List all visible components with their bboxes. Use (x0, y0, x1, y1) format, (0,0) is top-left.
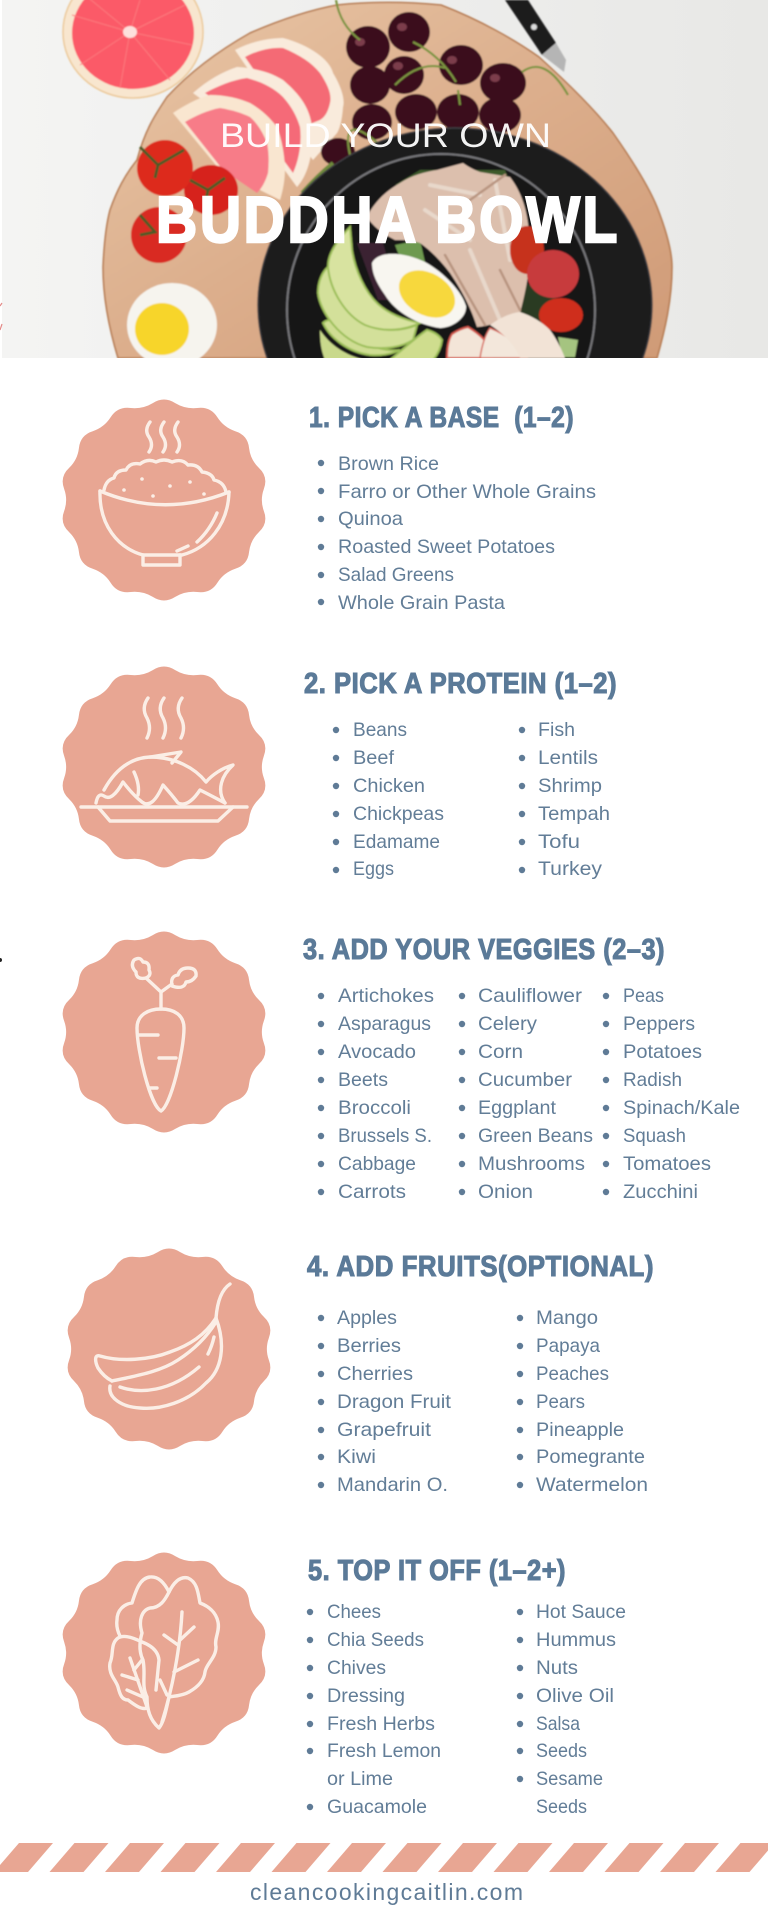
list: veggies column 3: Radish (623, 1069, 682, 1091)
list: proteins column 1: Eggs (353, 858, 394, 880)
panel: step 1 base (63, 400, 596, 614)
badge with banana icon (68, 1248, 270, 1450)
list: veggies column 3: Squash (623, 1125, 686, 1147)
salad greens (356, 242, 388, 301)
list: bases: Salad Greens (338, 564, 454, 586)
list: fruits column 1: Grapefruit (337, 1419, 432, 1441)
list: veggies column 3 (603, 985, 740, 1203)
list: proteins column 2: Turkey (538, 858, 602, 880)
list: proteins column 1 (333, 719, 444, 880)
list: fruits column 2: Pomegrante (536, 1446, 645, 1468)
striped divider (0, 1843, 768, 1872)
list: bases: Roasted Sweet Potatoes (338, 536, 555, 558)
list: fruits column 2: Papaya (536, 1335, 600, 1357)
list: toppings column 2: Seeds (536, 1796, 587, 1818)
list: veggies column 1 (318, 985, 434, 1203)
list: veggies column 2: Mushrooms (478, 1153, 585, 1175)
badge with fish icon (63, 666, 265, 868)
panel: step 5 toppings (63, 1552, 626, 1818)
list: veggies column 2: Cauliflower (478, 985, 583, 1007)
list: fruits column 1: Apples (337, 1307, 397, 1329)
list: proteins column 1: Edamame (353, 831, 440, 853)
list: fruits column 2 (517, 1307, 648, 1496)
list: toppings column 1: Chives (327, 1657, 386, 1679)
list: toppings column 2: Nuts (536, 1657, 578, 1679)
list: veggies column 1: Avocado (338, 1041, 416, 1063)
list: toppings column 1: Dressing (327, 1685, 405, 1707)
list: toppings column 1: Guacamole (327, 1796, 427, 1818)
footer website: cleancookingcaitlin.com (250, 1879, 523, 1905)
list: proteins column 2 (519, 719, 610, 880)
list: veggies column 3: Zucchini (623, 1181, 698, 1203)
list: fruits column 2: Mango (536, 1307, 598, 1329)
bowl and plate (256, 126, 654, 358)
apple slices (447, 327, 492, 358)
list: veggies column 3: Peas (623, 985, 664, 1007)
cut tomatoes (510, 226, 544, 274)
list: fruits column 2: Pears (536, 1391, 585, 1413)
panel: step 2 protein (63, 666, 617, 880)
list: veggies column 1: Broccoli (338, 1097, 411, 1119)
list: fruits column 1: Cherries (337, 1363, 413, 1385)
cherries (321, 12, 526, 166)
list: veggies column 1: Asparagus (338, 1013, 431, 1035)
list: proteins column 2: Tofu (538, 831, 580, 853)
heading: 4. ADD FRUITS(OPTIONAL) (307, 1251, 654, 1283)
list: proteins column 1: Beef (353, 747, 395, 769)
list: veggies column 1: Carrots (338, 1181, 406, 1203)
list: toppings column 2: Sesame (536, 1768, 603, 1790)
list: proteins column 1: Beans (353, 719, 407, 741)
heading: 2. PICK A PROTEIN (1–2) (304, 668, 617, 700)
list: veggies column 1: Artichokes (338, 985, 434, 1007)
heading: 5. TOP IT OFF (1–2+) (308, 1555, 566, 1587)
list: toppings column 1 (307, 1601, 441, 1818)
heading: 3. ADD YOUR VEGGIES (2–3) (303, 934, 665, 966)
list: toppings column 1: Chia Seeds (327, 1629, 424, 1651)
avocado slices (320, 330, 365, 360)
list: veggies column 3: Tomatoes (623, 1153, 711, 1175)
list: proteins column 2: Tempah (538, 803, 610, 825)
list: veggies column 2: Celery (478, 1013, 537, 1035)
list: toppings column 1: Fresh Herbs (327, 1713, 435, 1735)
list: proteins column 2: Fish (538, 719, 575, 741)
list: veggies column 3: Spinach/Kale (623, 1097, 740, 1119)
list: fruits column 1: Kiwi (337, 1446, 376, 1468)
shredded chicken (367, 163, 530, 327)
list: fruits column 2: Watermelon (536, 1474, 648, 1496)
hero photo: food on a wooden board (2, 0, 768, 358)
list: veggies column 2: Cucumber (478, 1069, 573, 1091)
list: veggies column 2: Eggplant (478, 1097, 557, 1119)
tomatoes (184, 165, 238, 215)
list: veggies column 2: Green Beans (478, 1125, 593, 1147)
list: veggies column 2: Onion (478, 1181, 533, 1203)
list: fruits column 2: Pineapple (536, 1419, 624, 1441)
panel: step 3 veggies (63, 932, 740, 1203)
list: bases (318, 453, 596, 614)
list: veggies column 2 (459, 985, 593, 1203)
badge with rice bowl icon (63, 400, 265, 600)
list: fruits column 1: Berries (337, 1335, 401, 1357)
list: bases: Brown Rice (338, 453, 439, 475)
knife (505, 0, 556, 55)
title line 2: BUDDHA BOWL (156, 184, 620, 256)
list: proteins column 1: Chicken (353, 775, 425, 797)
heading: 1. PICK A BASE (1–2) (309, 402, 574, 434)
list: fruits column 2: Peaches (536, 1363, 609, 1385)
list: toppings column 1: or Lime (327, 1768, 393, 1790)
grapefruit half (63, 0, 203, 98)
list: toppings column 1: Chees (327, 1601, 381, 1623)
panel: step 4 fruits (68, 1248, 654, 1496)
list: toppings column 2: Hot Sauce (536, 1601, 626, 1623)
list: fruits column 1: Dragon Fruit (337, 1391, 452, 1413)
list: toppings column 2 (517, 1601, 626, 1818)
wooden board (103, 2, 672, 358)
bowl egg (372, 254, 466, 328)
list: proteins column 2: Lentils (538, 747, 598, 769)
list: bases: Farro or Other Whole Grains (338, 481, 596, 503)
list: veggies column 1: Brussels S. (338, 1125, 432, 1147)
list: veggies column 3: Potatoes (623, 1041, 702, 1063)
list: proteins column 2: Shrimp (538, 775, 602, 797)
list: toppings column 2: Hummus (536, 1629, 616, 1651)
badge with lettuce icon (63, 1552, 265, 1754)
list: proteins column 1: Chickpeas (353, 803, 444, 825)
list: toppings column 1: Fresh Lemon (327, 1740, 441, 1762)
title line 1: BUILD YOUR OWN (220, 117, 551, 155)
title (156, 117, 620, 256)
list: veggies column 1: Beets (338, 1069, 388, 1091)
boiled egg (127, 283, 217, 367)
stray marks at left edge (0, 303, 2, 330)
list: toppings column 2: Salsa (536, 1713, 580, 1735)
list: veggies column 2: Corn (478, 1041, 523, 1063)
list: fruits column 1: Mandarin O. (337, 1474, 448, 1496)
list: bases: Quinoa (338, 508, 403, 530)
stray dot at left edge (0, 958, 2, 962)
badge with carrot icon (63, 932, 265, 1132)
list: veggies column 1: Cabbage (338, 1153, 416, 1175)
list: bases: Whole Grain Pasta (338, 592, 505, 614)
grapefruit slices (235, 38, 344, 160)
list: veggies column 3: Peppers (623, 1013, 695, 1035)
list: toppings column 2: Olive Oil (536, 1685, 614, 1707)
list: toppings column 2: Seeds (536, 1740, 587, 1762)
list: fruits column 1 (318, 1307, 452, 1496)
